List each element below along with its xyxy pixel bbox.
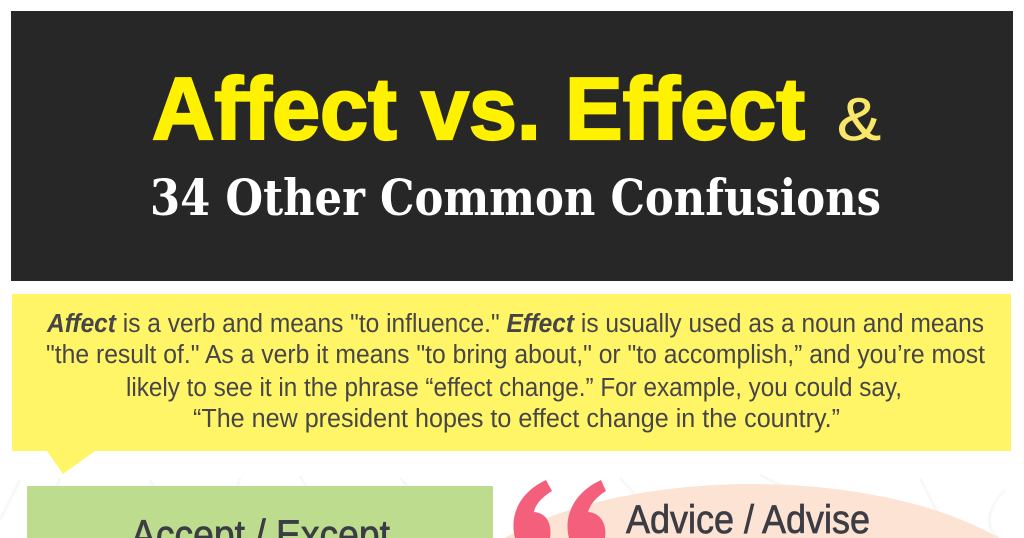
heading: Affect vs. Effect: Affect vs. Effect [152,59,805,158]
definition line 1: Affect is a verb and means "to influence." Effect is usually used as a noun and means [46,310,984,338]
icon: quotation marks [513,480,606,538]
ampersand: & [837,86,881,153]
subheading: 34 Other Common Confusions [150,168,881,227]
panel: Accept / Except [27,486,493,538]
definition line 2: "the result of." As a verb it means "to bring about," or "to accomplish,” and you’re most [46,341,985,369]
definition line 3: likely to see it in the phrase “effect change.” For example, you could say, [126,374,902,402]
panel: Advice / Advise [442,480,1024,538]
panel: definition speech bubble [12,294,1011,474]
definition line 4: “The new president hopes to effect change in the country.” [193,405,840,433]
panel: title banner [11,11,1013,281]
